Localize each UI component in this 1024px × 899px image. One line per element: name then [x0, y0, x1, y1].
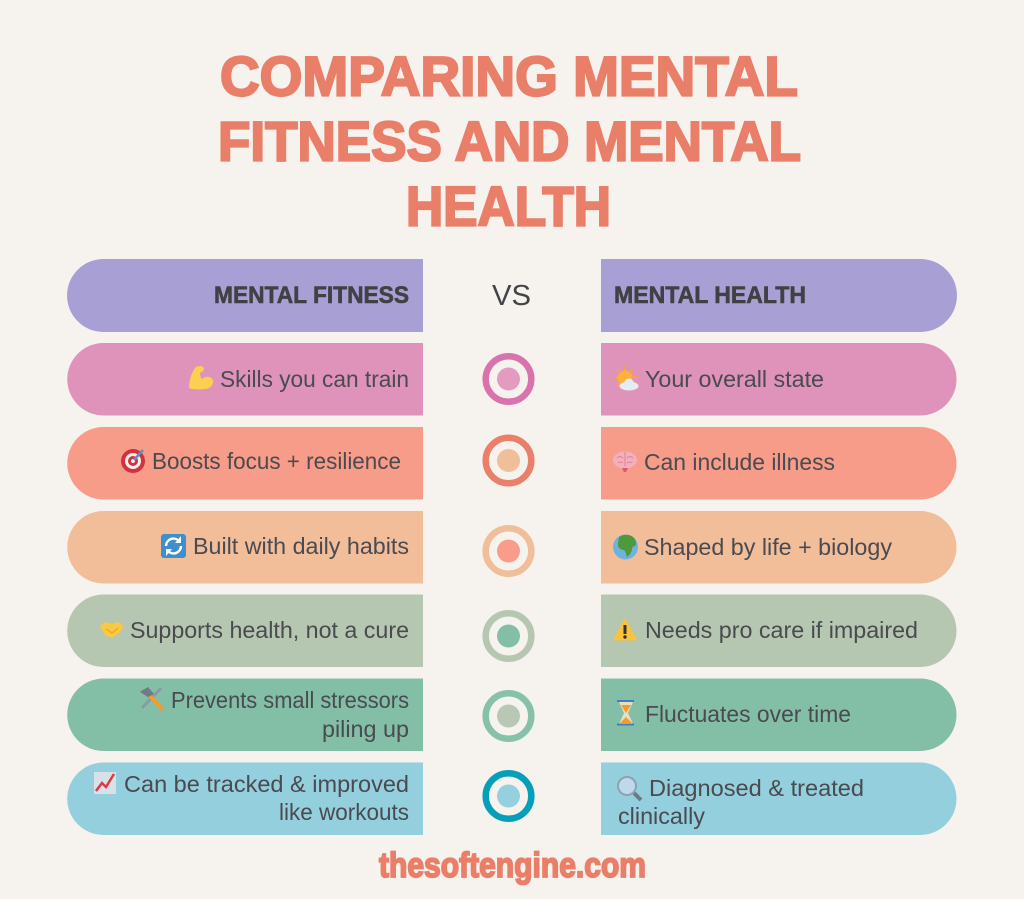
circle marker 3 — [486, 528, 531, 574]
panel: row 3 right — [601, 511, 956, 584]
panel: row 2 right: Can include illness — [644, 449, 835, 475]
footer url: thesoftengine.com — [379, 846, 646, 885]
panel: row 4 left — [67, 594, 423, 667]
panel: row 4 right — [601, 594, 956, 667]
panel: row 6 left — [67, 762, 423, 835]
panel: header mental fitness: MENTAL FITNESS — [214, 282, 409, 309]
panel: row 6 right: Diagnosed & treated — [649, 775, 864, 801]
panel: row 1 left: Skills you can train — [220, 366, 409, 392]
panel: row 5 left — [67, 678, 423, 751]
panel: row 3 left — [67, 511, 423, 584]
panel: header mental health — [601, 259, 957, 332]
circle marker 2 — [486, 438, 531, 483]
circle marker 6 — [486, 773, 531, 819]
circle marker 4 — [486, 613, 531, 659]
icon: flexed arm — [189, 366, 213, 389]
panel: row 3 left: Built with daily habits — [193, 533, 409, 559]
panel: row 2 left — [67, 427, 423, 500]
panel: row 5 left: piling up — [322, 716, 409, 742]
panel: row 6 left: Can be tracked & improved — [124, 771, 409, 797]
panel: row 5 right — [601, 678, 956, 751]
vs label: VS — [492, 280, 531, 312]
title: COMPARING MENTAL — [220, 46, 798, 108]
panel: row 4 right: Needs pro care if impaired — [645, 617, 918, 643]
panel: row 6 left: like workouts — [279, 799, 409, 825]
panel: row 1 right — [601, 343, 956, 416]
icon: globe — [613, 534, 638, 560]
panel: row 3 right: Shaped by life + biology — [644, 534, 892, 560]
panel: row 5 left: Prevents small stressors — [171, 687, 409, 713]
panel: row 5 right: Fluctuates over time — [645, 701, 851, 727]
title — [218, 46, 801, 238]
panel: row 1 right: Your overall state — [645, 366, 824, 392]
panel: row 4 left: Supports health, not a cure — [130, 617, 409, 643]
title: FITNESS AND MENTAL — [218, 110, 801, 172]
panel: row 2 left: Boosts focus + resilience — [152, 448, 401, 474]
panel: row 6 right: clinically — [618, 803, 705, 829]
icon: magnifier — [618, 777, 641, 800]
icon: sun behind cloud — [614, 366, 638, 390]
icon: hammer and wrench — [140, 687, 163, 710]
panel: header mental fitness — [67, 259, 423, 332]
panel: row 1 left — [67, 343, 423, 416]
panel: row 6 right — [601, 762, 956, 835]
panel: header mental health: MENTAL HEALTH — [614, 282, 806, 309]
icon: warning sign — [613, 618, 637, 641]
icon: chart increasing — [94, 772, 116, 794]
icon: target — [121, 449, 145, 473]
icon: brain — [613, 452, 637, 472]
circle marker 5 — [486, 693, 531, 739]
title: HEALTH — [406, 176, 611, 238]
icon: refresh arrows — [161, 534, 186, 558]
panel: row 2 right — [601, 427, 956, 500]
icon: handshake — [100, 622, 123, 638]
icon: hourglass — [617, 700, 634, 726]
circle marker 1 — [486, 356, 531, 402]
